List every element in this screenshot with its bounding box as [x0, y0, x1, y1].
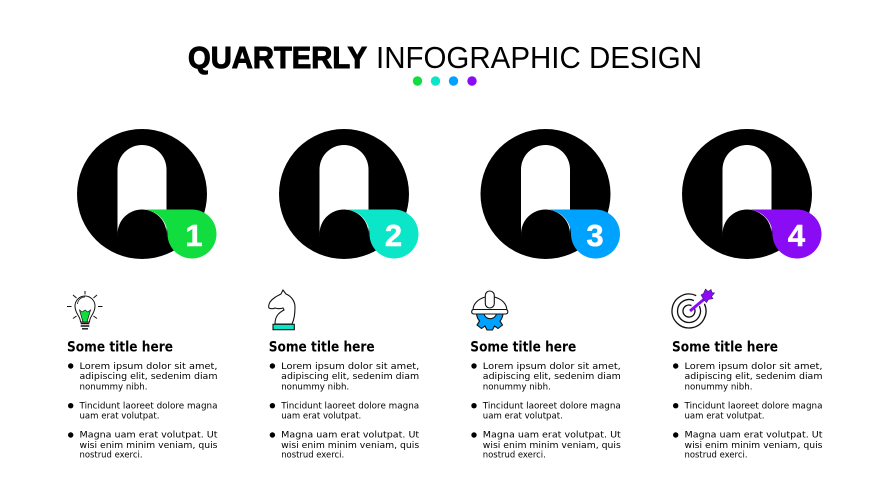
bullet list: uam erat volutpat. — [684, 411, 764, 421]
bullet list: Tincidunt laoreet dolore magna — [482, 401, 621, 411]
bullet list: Magna uam erat volutpat. Ut — [80, 431, 218, 441]
bullet list: wisi enim minim veniam, quis — [281, 441, 420, 451]
bullet list: nonummy nibh. — [684, 382, 752, 392]
bullet list: Magna uam erat volutpat. Ut — [483, 431, 621, 441]
bullet list: nonummy nibh. — [483, 382, 551, 392]
bullet list: Tincidunt laoreet dolore magna — [79, 401, 217, 411]
bullet list: adipiscing elit, sedenim diam — [483, 372, 621, 382]
bullet list: adipiscing elit, sedenim diam — [281, 372, 419, 382]
icon: hard hat and gear — [472, 291, 508, 330]
bullet list: nonummy nibh. — [281, 382, 349, 392]
badge: letter Q with number 2 — [279, 129, 418, 259]
icon: chess knight — [269, 290, 295, 330]
bullet list — [673, 362, 823, 461]
bullet list: Lorem ipsum dolor sit amet, — [281, 362, 419, 372]
badge: letter Q with number 3: 3 — [586, 218, 604, 253]
bullet list: adipiscing elit, sedenim diam — [684, 372, 822, 382]
panel: quarter 4 — [672, 129, 823, 461]
badge: letter Q with number 4: 4 — [788, 218, 806, 253]
title: INFOGRAPHIC DESIGN — [376, 40, 702, 75]
badge: letter Q with number 1 — [77, 129, 216, 259]
bullet list: nostrud exerci. — [281, 451, 344, 461]
bullet list: Lorem ipsum dolor sit amet, — [684, 362, 822, 372]
bullet list: Tincidunt laoreet dolore magna — [684, 401, 822, 411]
badge: letter Q with number 2: 2 — [385, 218, 402, 253]
badge: letter Q with number 3 — [480, 129, 620, 259]
colour dots — [413, 76, 477, 86]
bullet list: uam erat volutpat. — [483, 411, 563, 421]
panel: quarter 3 — [470, 129, 621, 461]
bullet list: nostrud exerci. — [80, 451, 142, 461]
bullet list: Lorem ipsum dolor sit amet, — [483, 362, 621, 372]
title — [188, 40, 702, 75]
bullet list: nonummy nibh. — [80, 382, 148, 392]
panel: quarter 1 — [67, 129, 218, 461]
heading: Some title here — [269, 340, 375, 356]
bullet list: uam erat volutpat. — [281, 411, 361, 421]
bullet list: wisi enim minim veniam, quis — [80, 441, 218, 451]
bullet list: Tincidunt laoreet dolore magna — [280, 401, 419, 411]
bullet list: adipiscing elit, sedenim diam — [80, 372, 218, 382]
badge: letter Q with number 4 — [682, 129, 822, 259]
panel: quarter 2 — [269, 129, 420, 461]
title: QUARTERLY — [188, 40, 367, 75]
bullet list: Magna uam erat volutpat. Ut — [684, 431, 823, 441]
bullet list: nostrud exerci. — [483, 451, 546, 461]
bullet list — [68, 362, 218, 461]
heading: Some title here — [67, 340, 173, 356]
bullet list: Magna uam erat volutpat. Ut — [281, 431, 420, 441]
heading: Some title here — [672, 340, 778, 356]
badge: letter Q with number 1: 1 — [185, 218, 203, 253]
bullet list: Lorem ipsum dolor sit amet, — [80, 362, 218, 372]
bullet list: nostrud exerci. — [684, 451, 748, 461]
bullet list — [270, 362, 420, 461]
bullet list: wisi enim minim veniam, quis — [684, 441, 823, 451]
icon: light bulb — [67, 291, 102, 329]
bullet list: uam erat volutpat. — [80, 411, 160, 421]
bullet list — [471, 362, 621, 461]
bullet list: wisi enim minim veniam, quis — [483, 441, 621, 451]
icon: target and arrow — [672, 289, 714, 328]
heading: Some title here — [470, 340, 576, 356]
